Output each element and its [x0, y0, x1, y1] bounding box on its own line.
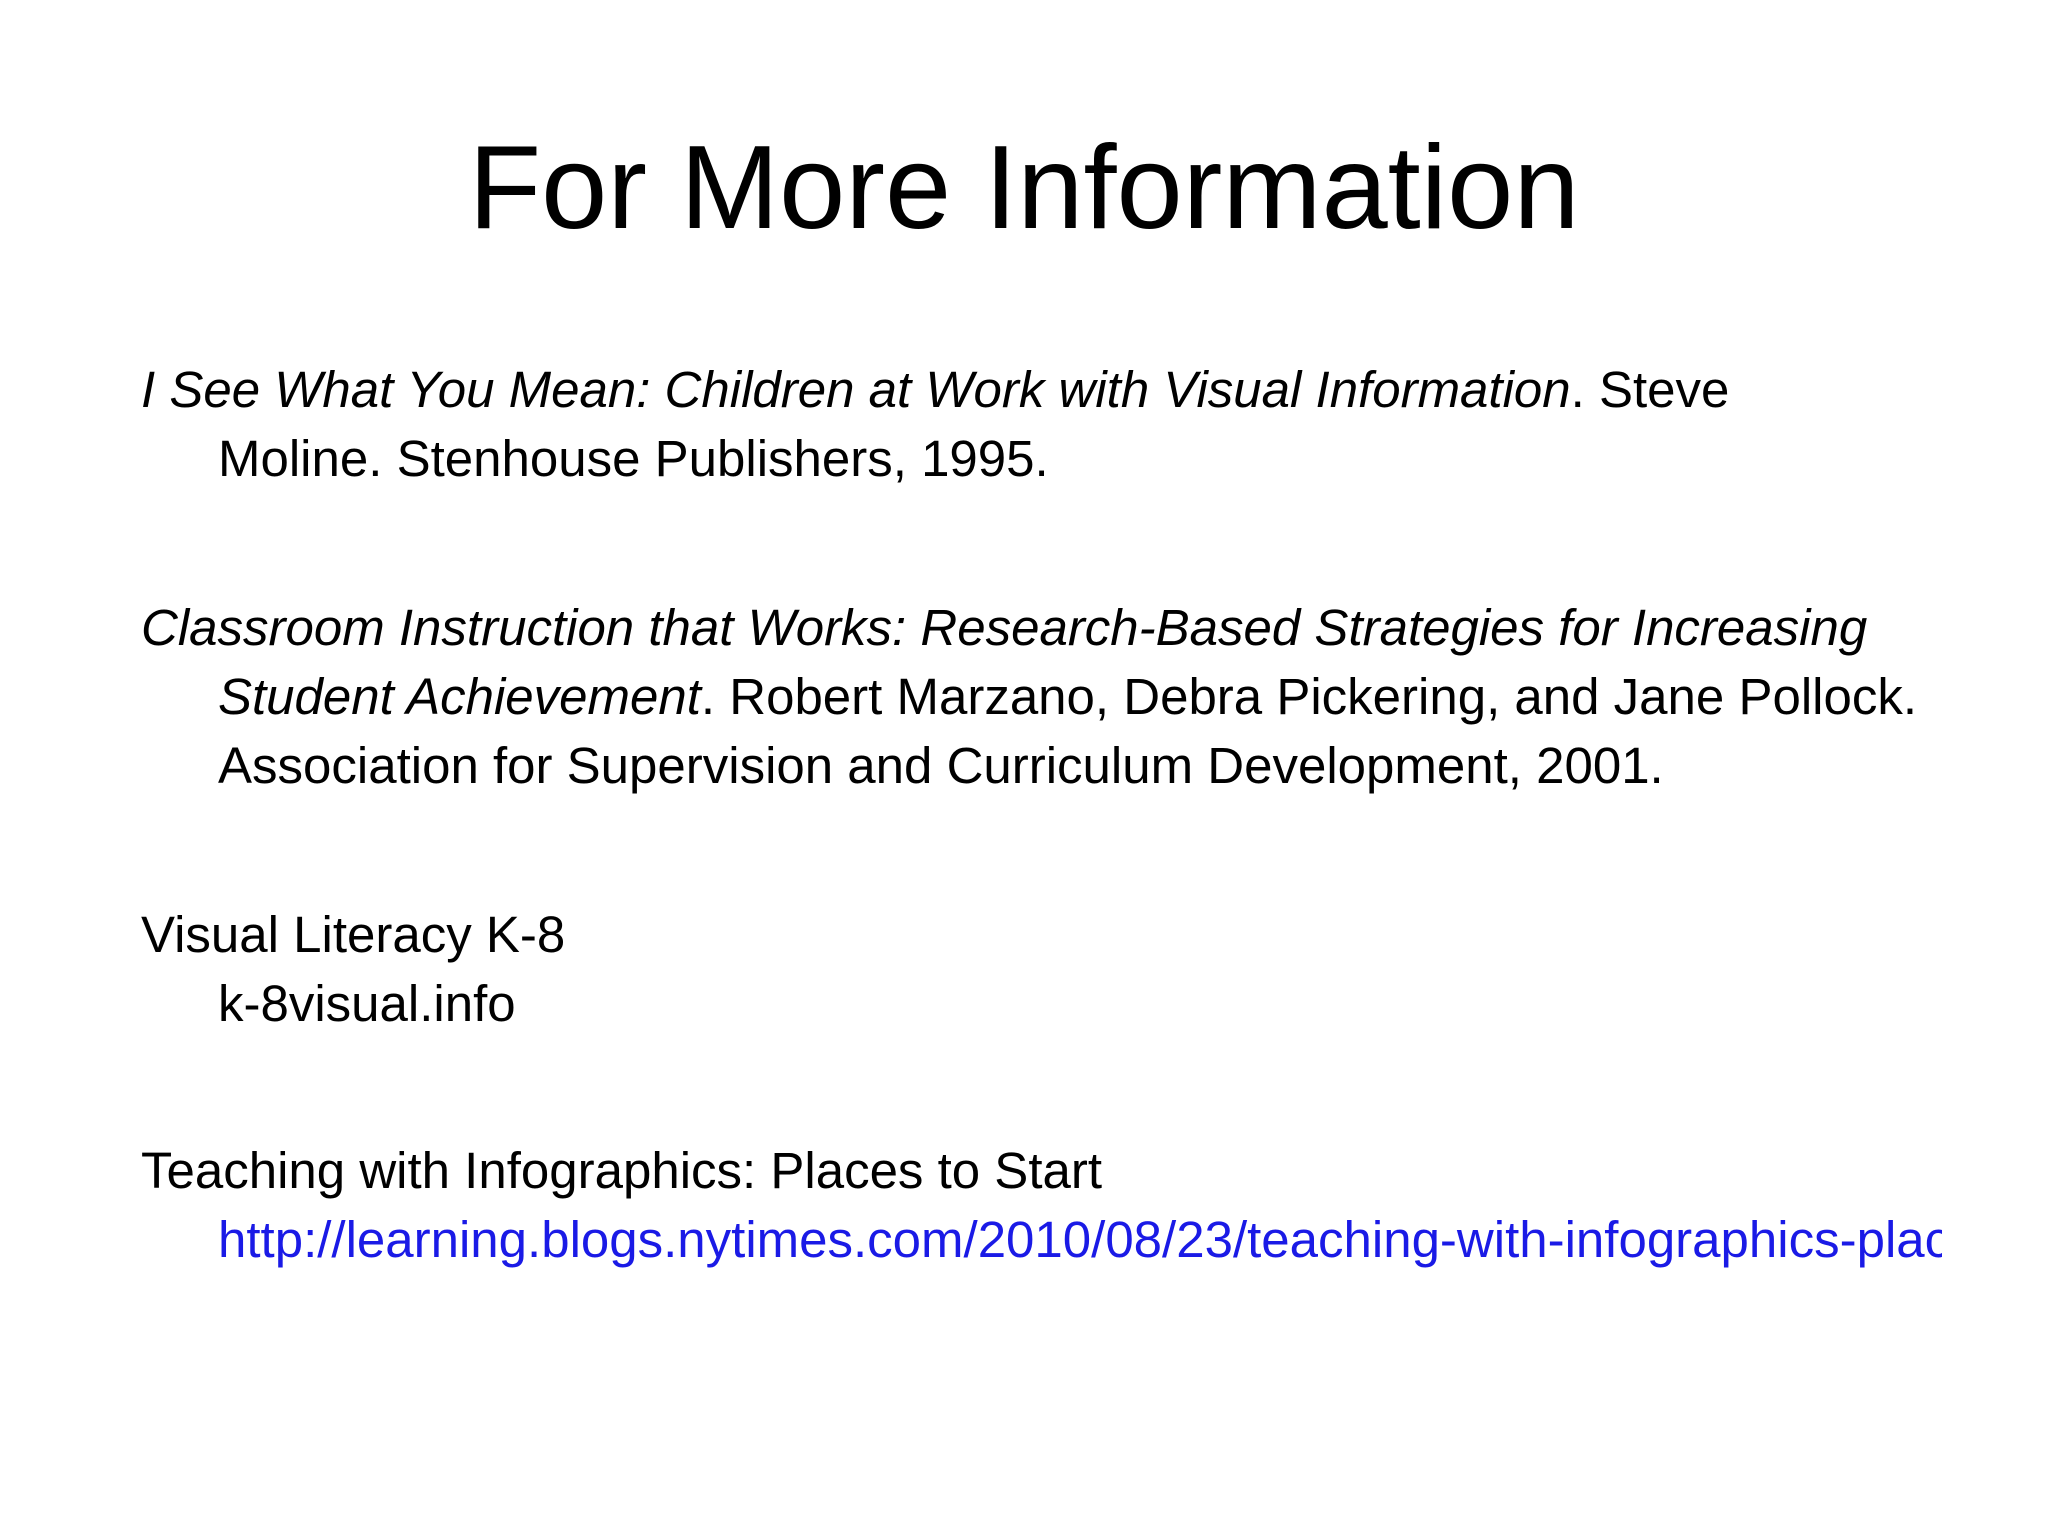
reference 1: I See What You Mean: [141, 361, 1729, 487]
reference 3: Visual Literacy K-8: k-8visual.info: [218, 975, 516, 1032]
reference 2: Classroom Instruction that Works: Classroom Instruction that Works: Research-Based Strategies for Increasing: [141, 599, 1867, 656]
reference 2: Classroom Instruction that Works: Student Achievement. Robert Marzano, Debra Pickering, and Jane Pollock.: [218, 668, 1917, 725]
reference 3: Visual Literacy K-8: [141, 906, 565, 1032]
reference 1: I See What You Mean: I See What You Mean: Children at Work with Visual Information. Steve: [141, 361, 1729, 418]
reference 1: I See What You Mean: Moline. Stenhouse Publishers, 1995.: [218, 430, 1049, 487]
reference 3: Visual Literacy K-8: Visual Literacy K-8: [141, 906, 565, 963]
reference 4: Teaching with Infographics: [141, 1145, 1942, 1268]
title: For More Information: [468, 121, 1580, 254]
reference 2: Classroom Instruction that Works: [141, 599, 1917, 794]
reference 2: Classroom Instruction that Works: Association for Supervision and Curriculum Development, 2001.: [218, 737, 1664, 794]
